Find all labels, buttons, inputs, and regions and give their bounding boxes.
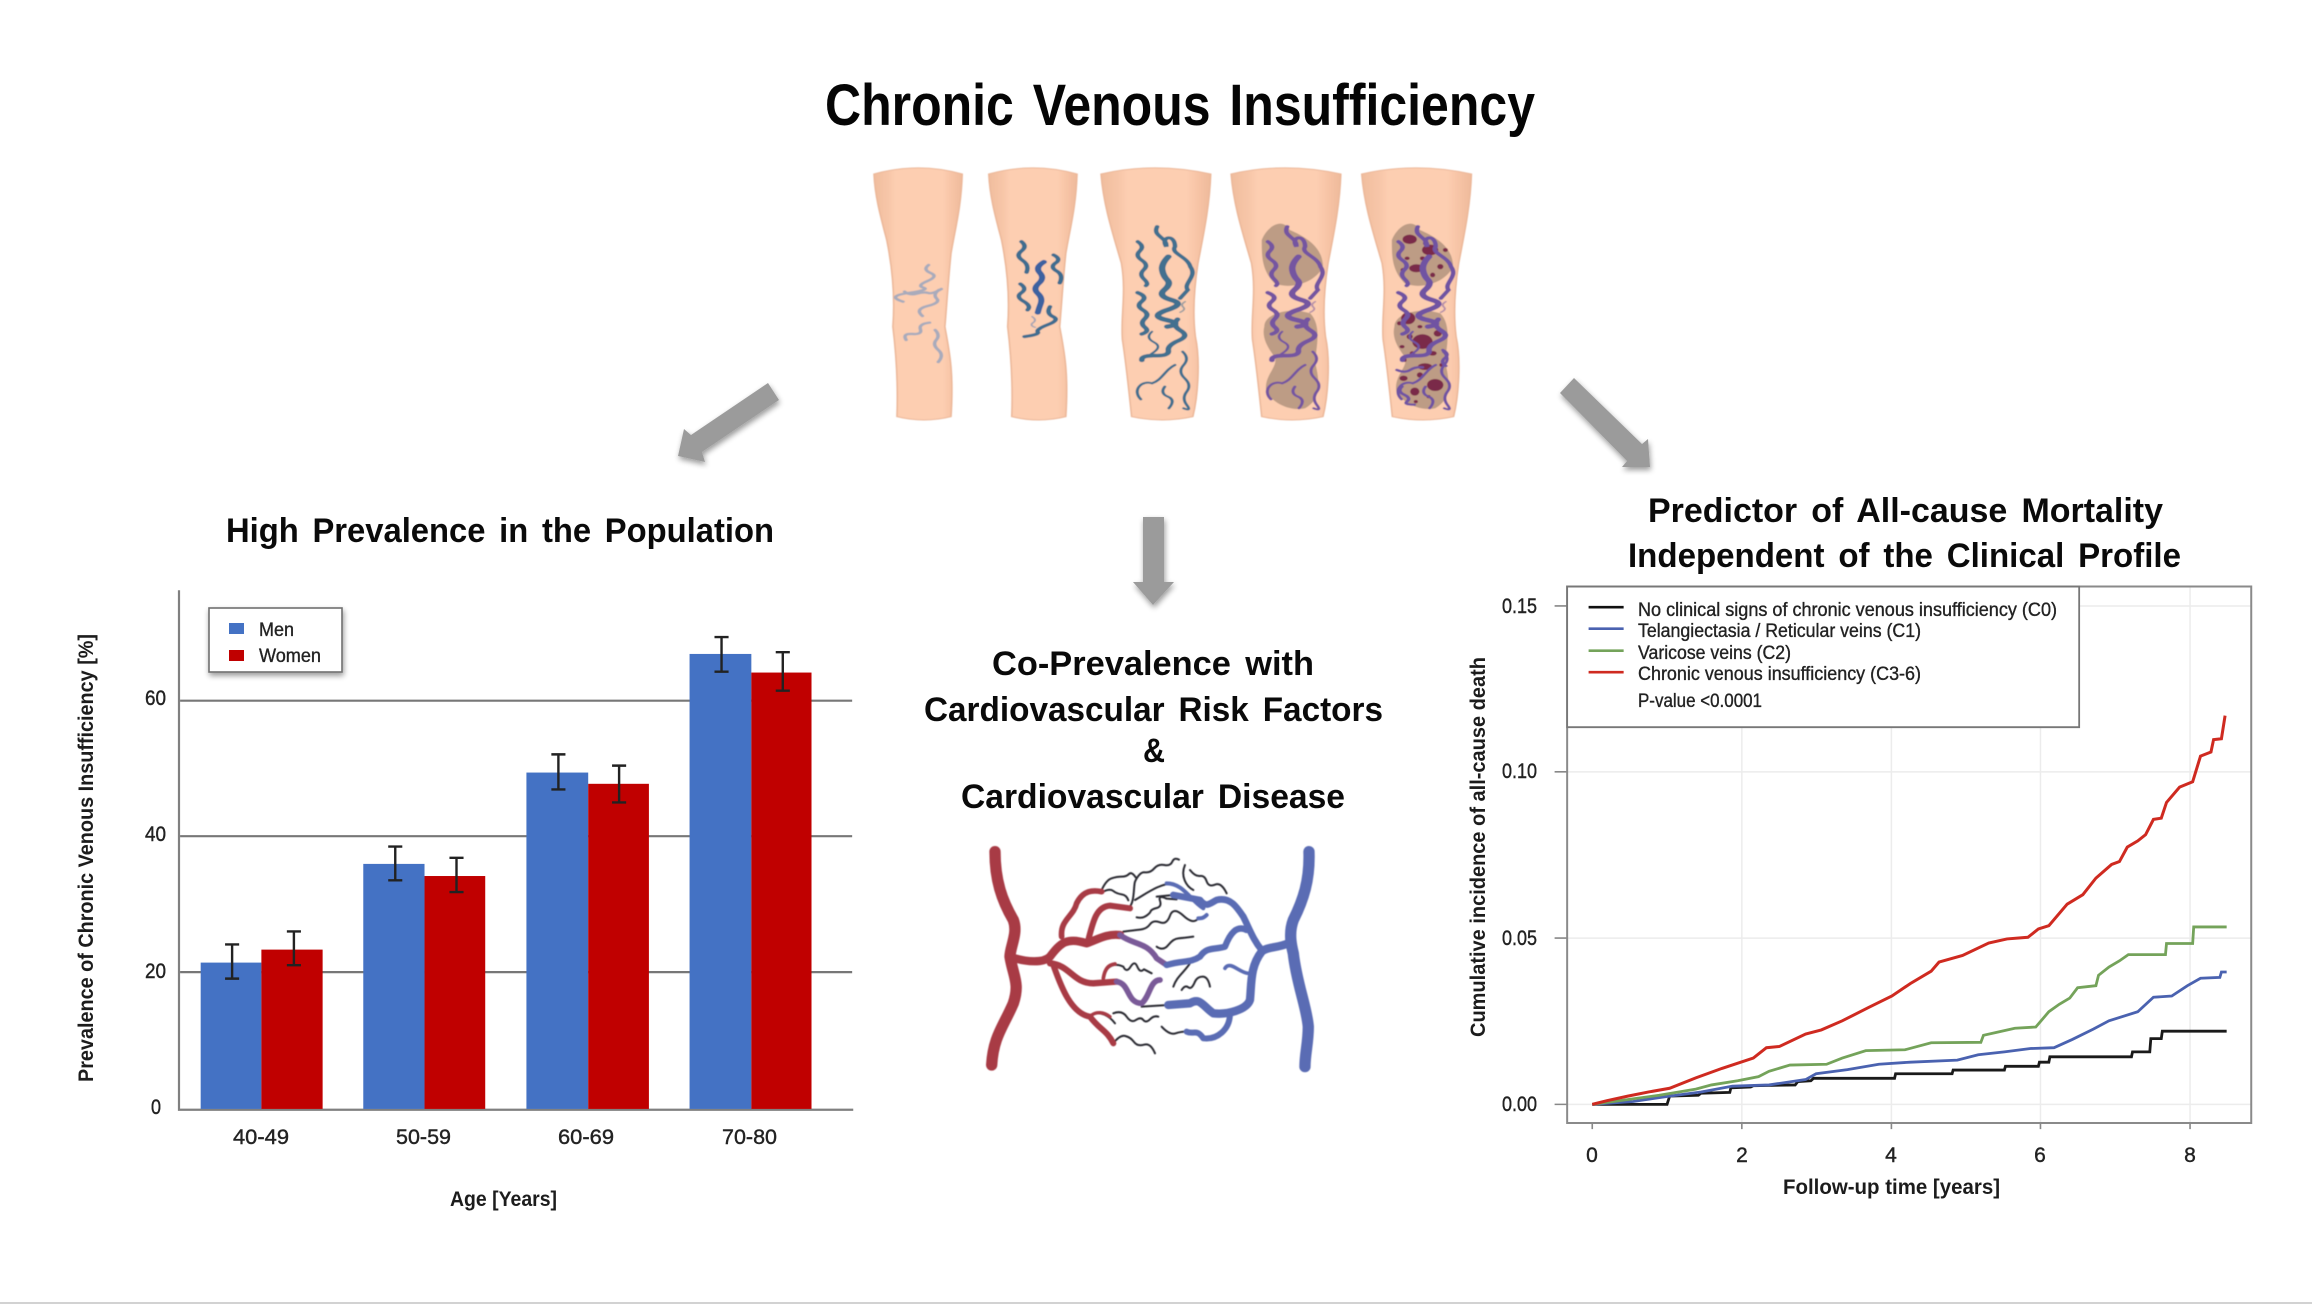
bar chart: prevalence by age and sex: [75, 590, 853, 1211]
transition vessels: [1117, 935, 1167, 1003]
heading: co-prevalence: [924, 645, 1383, 816]
curve: C2: [1592, 927, 2227, 1104]
heading: co-prevalence: Co-Prevalence with: [992, 645, 1314, 683]
x-axis tick labels: 70-80: [722, 1126, 777, 1149]
x-axis tick labels: 40-49: [233, 1126, 289, 1149]
bars and axes: [179, 590, 853, 1110]
plot area with curves: [1555, 587, 2251, 1129]
x-axis tick labels: [233, 1126, 777, 1149]
y-axis title: Cumulative incidence of all-cause death: [1467, 657, 1490, 1037]
x-axis tick labels: 6: [2034, 1144, 2046, 1167]
x-axis tick labels: 8: [2184, 1144, 2196, 1167]
legend: men and women: Men: [259, 620, 294, 641]
capillaries: [1092, 859, 1227, 1053]
curve: C0: [1592, 1031, 2227, 1104]
y-axis tick labels: 0.05: [1502, 927, 1537, 950]
x-axis title: Age [Years]: [450, 1188, 557, 1211]
heading: mortality predictor: Predictor of All-cause Mortality: [1648, 492, 2163, 530]
leg 1: telangiectasia: [874, 168, 962, 420]
x-axis tick labels: 60-69: [558, 1126, 614, 1149]
y-axis tick labels: 40: [145, 823, 166, 846]
y-axis tick labels: 60: [145, 687, 166, 710]
y-axis tick labels: 0: [151, 1096, 161, 1119]
leg 2: reticular veins: [989, 168, 1077, 420]
x-axis tick labels: 2: [1736, 1144, 1748, 1167]
legend labels: [1638, 600, 2057, 712]
y-axis tick labels: 0.15: [1502, 595, 1537, 618]
illustration: five legs showing disease stages: [874, 168, 1471, 420]
title: Chronic Venous Insufficiency: [825, 73, 1535, 138]
heading: high prevalence: High Prevalence in the Population: [226, 512, 774, 550]
artery: [992, 852, 1130, 1065]
y-axis tick labels: [1502, 595, 1537, 1116]
y-axis tick labels: 20: [145, 960, 166, 983]
vein: [1167, 852, 1309, 1067]
legend labels: Chronic venous insufficiency (C3-6): [1638, 664, 1921, 685]
heading: co-prevalence: &: [1143, 732, 1165, 770]
legend labels: Telangiectasia / Reticular veins (C1): [1638, 621, 1921, 642]
curve: C1: [1592, 972, 2227, 1104]
illustration: capillary bed between artery and vein: [992, 852, 1309, 1067]
legend: men and women: [209, 608, 342, 672]
y-axis title: Prevalence of Chronic Venous Insufficiency [%]: [75, 634, 98, 1082]
x-axis title: Follow-up time [years]: [1783, 1176, 2000, 1199]
x-axis tick labels: 50-59: [396, 1126, 451, 1149]
y-axis tick labels: [145, 687, 166, 1119]
legend labels: No clinical signs of chronic venous insufficiency (C0): [1638, 600, 2057, 621]
arrow: to mortality: [1560, 378, 1650, 467]
line chart: cumulative incidence of all-cause death: [1467, 587, 2251, 1199]
arrow: to cardiovascular: [1133, 517, 1174, 605]
leg 5: ulceration: [1362, 168, 1471, 420]
legend: men and women: Women: [259, 646, 321, 667]
legend labels: Varicose veins (C2): [1638, 643, 1791, 664]
heading: co-prevalence: Cardiovascular Disease: [961, 778, 1345, 816]
bottom rule: [0, 1302, 2312, 1304]
leg 4: edema and skin changes: [1231, 168, 1341, 420]
legend line samples: [1589, 607, 1624, 672]
heading: mortality predictor: Independent of the Clinical Profile: [1628, 537, 2181, 575]
heading: co-prevalence: Cardiovascular Risk Factors: [924, 691, 1383, 729]
x-axis tick labels: 4: [1885, 1144, 1897, 1167]
curve: C3-6: [1592, 716, 2225, 1104]
y-axis tick labels: 0.00: [1502, 1093, 1537, 1116]
leg 3: varicose veins: [1101, 168, 1211, 420]
arrow: to prevalence: [678, 383, 779, 462]
heading: mortality predictor: [1628, 492, 2181, 575]
y-axis tick labels: 0.10: [1502, 760, 1537, 783]
x-axis tick labels: [1586, 1144, 2196, 1167]
x-axis tick labels: 0: [1586, 1144, 1598, 1167]
legend labels: P-value <0.0001: [1638, 691, 1762, 712]
